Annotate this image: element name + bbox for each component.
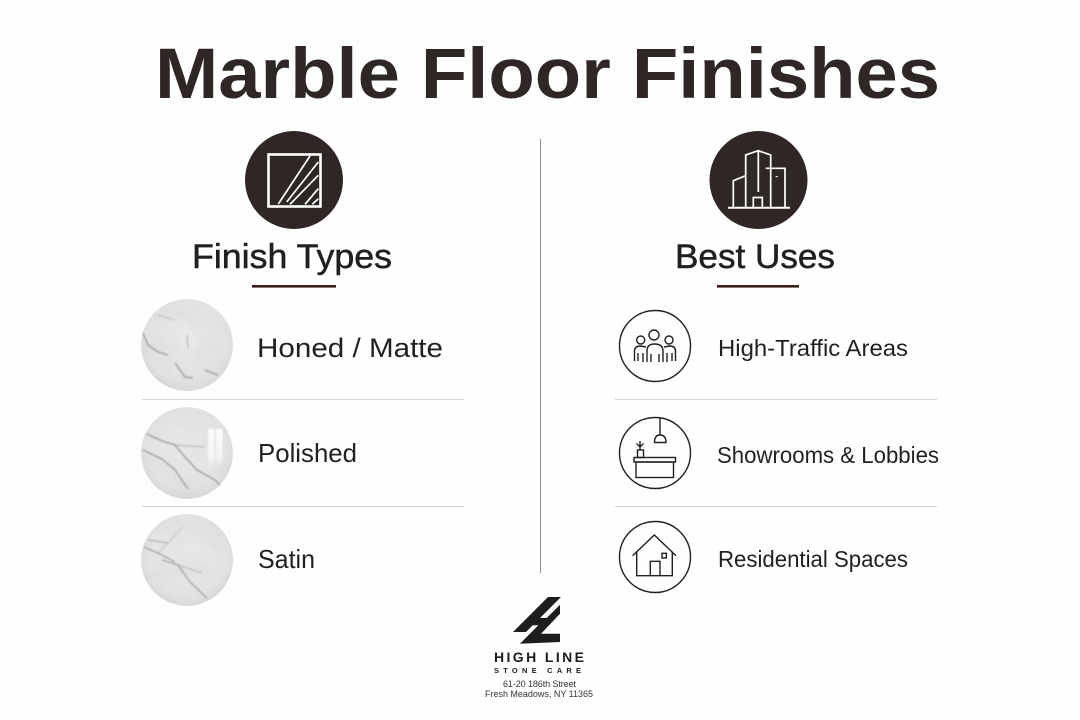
title: Marble Floor Finishes	[155, 35, 940, 114]
heading underline	[252, 285, 336, 288]
use row: high-traffic areas	[620, 310, 908, 382]
heading underline	[717, 285, 799, 288]
icon: buildings	[710, 131, 808, 229]
logo and address: Fresh Meadows, NY 11365	[485, 689, 593, 699]
logo and address	[485, 597, 593, 699]
panel: finish types	[141, 131, 464, 606]
brand tagline: STONE CARE	[494, 666, 581, 675]
heading: best uses: Best Uses	[675, 238, 835, 276]
use row: residential spaces	[620, 522, 908, 592]
finish row: satin: Satin	[258, 544, 315, 574]
finish row: satin	[141, 514, 315, 606]
finish row: polished	[141, 407, 357, 499]
use row: high-traffic areas: High-Traffic Areas	[718, 335, 908, 361]
center divider	[540, 139, 542, 573]
icon: house	[620, 522, 690, 592]
icon: people	[620, 310, 690, 382]
finish row: honed	[141, 299, 443, 391]
icon: high line logo	[513, 597, 561, 644]
icon: marble square	[245, 131, 343, 229]
finish row: polished: Polished	[258, 438, 357, 468]
icon: reception desk	[620, 418, 690, 488]
use row: showrooms and lobbies: Showrooms & Lobbies	[717, 442, 939, 468]
use row: residential spaces: Residential Spaces	[718, 546, 908, 572]
heading: finish types: Finish Types	[192, 238, 392, 276]
finish row: honed: Honed / Matte	[257, 333, 443, 363]
brand name: HIGH LINE	[494, 649, 584, 665]
panel: best uses	[615, 131, 939, 592]
use row: showrooms and lobbies	[620, 418, 939, 488]
address: 61-20 186th Street	[503, 679, 576, 689]
